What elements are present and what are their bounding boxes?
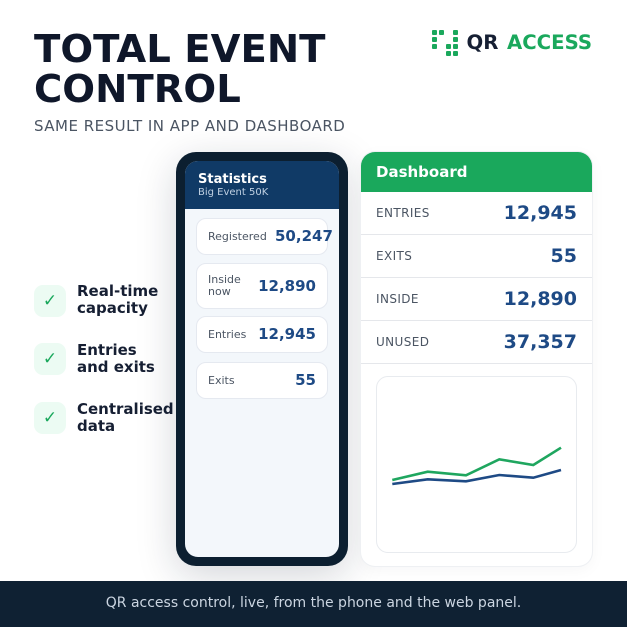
row: inside bbox=[361, 278, 592, 321]
phone screen bbox=[185, 161, 339, 557]
footer band bbox=[0, 581, 627, 627]
series: inside line bbox=[392, 470, 561, 484]
stat card: registered bbox=[196, 218, 328, 255]
feature: centralised data: Centralised bbox=[77, 400, 174, 418]
phone bbox=[176, 152, 348, 566]
line chart bbox=[392, 446, 562, 486]
row: entries: 12,945 bbox=[504, 202, 577, 224]
stat card: inside now: Inside bbox=[208, 273, 241, 286]
dashboard header: Dashboard bbox=[376, 163, 467, 181]
logo text: ACCESS bbox=[507, 31, 592, 54]
row: unused: 37,357 bbox=[504, 331, 577, 353]
stat card: registered: 50,247 bbox=[275, 227, 333, 245]
row: unused bbox=[361, 321, 592, 364]
stat card: inside now: 12,890 bbox=[258, 277, 316, 295]
feature: real-time capacity bbox=[34, 282, 158, 317]
stat card: inside now: now bbox=[208, 285, 231, 298]
dashboard panel bbox=[361, 152, 592, 566]
feature: centralised data bbox=[34, 400, 174, 435]
logo text: QR bbox=[466, 31, 498, 54]
row: exits: 55 bbox=[551, 245, 577, 267]
row: inside: INSIDE bbox=[376, 292, 419, 306]
stat card: exits bbox=[196, 362, 328, 399]
row: unused: UNUSED bbox=[376, 335, 429, 349]
feature: centralised data: ✓ bbox=[43, 408, 57, 428]
feature: real-time capacity: ✓ bbox=[43, 291, 57, 311]
row: exits bbox=[361, 235, 592, 278]
row: entries bbox=[361, 192, 592, 235]
title: TOTAL EVENT bbox=[34, 27, 325, 72]
phone header bbox=[185, 161, 339, 209]
row: exits: EXITS bbox=[376, 249, 412, 263]
chart card bbox=[376, 376, 577, 553]
feature: centralised data: data bbox=[77, 417, 115, 435]
feature: real-time capacity: capacity bbox=[77, 299, 148, 317]
stat card: inside now bbox=[196, 263, 328, 309]
dashboard header bbox=[361, 152, 592, 192]
logo text bbox=[466, 31, 592, 54]
feature list bbox=[34, 282, 174, 435]
feature: entries and exits: Entries bbox=[77, 341, 137, 359]
phone header: Statistics bbox=[198, 172, 267, 187]
row: entries: ENTRIES bbox=[376, 206, 430, 220]
feature: entries and exits bbox=[34, 341, 155, 376]
logo bbox=[432, 30, 592, 56]
stat card: exits: Exits bbox=[208, 374, 235, 387]
title bbox=[34, 27, 326, 112]
phone header: Big Event 50K bbox=[198, 187, 268, 198]
stat card: exits: 55 bbox=[295, 371, 316, 389]
title: CONTROL bbox=[34, 67, 241, 112]
feature: real-time capacity: Real-time bbox=[77, 282, 158, 300]
stat card: entries: Entries bbox=[208, 328, 246, 341]
stat card: registered: Registered bbox=[208, 230, 267, 243]
series: entries line bbox=[392, 448, 561, 480]
row: inside: 12,890 bbox=[504, 288, 577, 310]
footer text: QR access control, live, from the phone and the web panel. bbox=[106, 595, 521, 611]
feature: entries and exits: ✓ bbox=[43, 349, 57, 369]
stat card: entries: 12,945 bbox=[258, 325, 316, 343]
feature: entries and exits: and exits bbox=[77, 358, 155, 376]
subtitle: SAME RESULT IN APP AND DASHBOARD bbox=[34, 117, 345, 135]
icon: QR squares bbox=[432, 30, 458, 56]
stat card: entries bbox=[196, 316, 328, 353]
